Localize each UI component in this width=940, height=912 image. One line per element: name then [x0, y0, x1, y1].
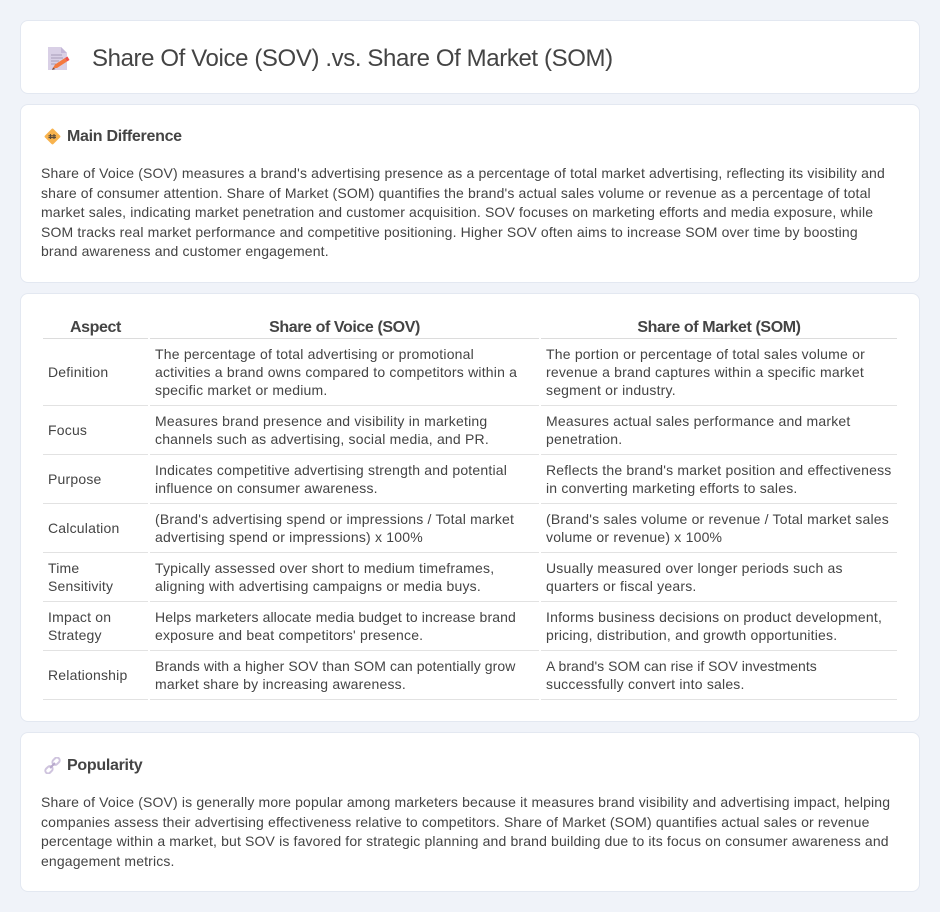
row: calculation: volume or revenue) x 100%: [546, 529, 722, 545]
row: calculation: (Brand's advertising spend or impressions / Total market: [155, 511, 514, 527]
row: definition: Definition: [48, 364, 108, 380]
row: impact on strategy: Informs business decisions on product development,: [546, 609, 882, 625]
text: main difference paragraph: share of consumer attention. Share of Market (SOM) quantifies the brand's actual sales volume or revenue as a percentage of total: [41, 185, 871, 201]
row: impact on strategy: Helps marketers allocate media budget to increase brand: [155, 609, 516, 625]
row: focus: [43, 413, 897, 455]
row: time sensitivity: aligning with advertising campaigns or media buys.: [155, 578, 481, 594]
icon: chain link: [44, 757, 61, 774]
table header row: [43, 319, 897, 700]
row: time sensitivity: quarters or fiscal years.: [546, 578, 696, 594]
row: purpose: influence on consumer awareness.: [155, 480, 378, 496]
row: impact on strategy: Strategy: [48, 627, 102, 643]
comparison table: [43, 319, 897, 700]
row: focus: Measures brand presence and visibility in marketing: [155, 413, 487, 429]
text: popularity paragraph: percentage within a market, but SOV is favored for strategic planning and brand building due to its focus on consumer awareness and: [41, 833, 889, 849]
panel: title card: [20, 20, 920, 94]
row: focus: channels such as advertising, social media, and PR.: [155, 431, 489, 447]
panel: comparison table: [20, 293, 920, 722]
row: relationship: A brand's SOM can rise if SOV investments: [546, 658, 817, 674]
panel: popularity: [20, 732, 920, 892]
table header row: Aspect: [70, 319, 121, 336]
row: relationship: [43, 658, 897, 700]
row: definition: specific market or medium.: [155, 382, 327, 398]
row: focus: Focus: [48, 422, 87, 438]
icon: orange diamond: [44, 128, 60, 144]
text: main difference paragraph: Share of Voice (SOV) measures a brand's advertising presence as a percentage of total market advertising, reflecting its visibility and: [41, 165, 885, 181]
heading: popularity: Popularity: [67, 757, 142, 774]
row: calculation: advertising spend or impressions) x 100%: [155, 529, 423, 545]
row: focus: penetration.: [546, 431, 622, 447]
row: purpose: in converting marketing efforts to sales.: [546, 480, 798, 496]
row: calculation: Calculation: [48, 520, 119, 536]
row: time sensitivity: Sensitivity: [48, 578, 113, 594]
title: Share Of Voice (SOV) .vs. Share Of Market (SOM): [92, 45, 613, 72]
row: purpose: Reflects the brand's market position and effectiveness: [546, 462, 892, 478]
text: popularity paragraph: engagement metrics.: [41, 853, 175, 869]
row: definition: The percentage of total advertising or promotional: [155, 346, 474, 362]
row: definition: activities a brand owns compared to competitors within a: [155, 364, 517, 380]
text: main difference paragraph: SOM tracks real market performance and competitive positioning. Higher SOV often aims to increase SOM over time by boosting: [41, 224, 858, 240]
row: impact on strategy: [43, 609, 897, 651]
row: impact on strategy: Impact on: [48, 609, 111, 625]
row: relationship: market share by increasing awareness.: [155, 676, 406, 692]
row: time sensitivity: Typically assessed over short to medium timeframes,: [155, 560, 494, 576]
row: purpose: [43, 462, 897, 504]
row: calculation: [43, 511, 897, 553]
text: popularity paragraph: companies assess their advertising effectiveness relative to competitors. Share of Market (SOM) quantifies actual sales or revenue: [41, 814, 870, 830]
row: relationship: Brands with a higher SOV than SOM can potentially grow: [155, 658, 516, 674]
icon: document with pencil: [48, 47, 70, 70]
row: definition: [43, 346, 897, 406]
row: relationship: Relationship: [48, 667, 127, 683]
row: relationship: successfully convert into sales.: [546, 676, 745, 692]
text: popularity paragraph: Share of Voice (SOV) is generally more popular among marketers because it measures brand visibility and advertising impact, helping: [41, 794, 890, 810]
row: calculation: (Brand's sales volume or revenue / Total market sales: [546, 511, 889, 527]
row: impact on strategy: pricing, distribution, and growth opportunities.: [546, 627, 837, 643]
row: purpose: Purpose: [48, 471, 102, 487]
row: time sensitivity: Usually measured over longer periods such as: [546, 560, 843, 576]
row: purpose: Indicates competitive advertising strength and potential: [155, 462, 507, 478]
text: main difference paragraph: market sales, indicating market penetration and customer acquisition. SOV focuses on marketing efforts and media exposure, while: [41, 204, 873, 220]
row: definition: revenue a brand captures within a specific market: [546, 364, 864, 380]
text: main difference paragraph: [41, 165, 885, 259]
row: focus: Measures actual sales performance and market: [546, 413, 850, 429]
row: time sensitivity: Time: [48, 560, 79, 576]
table header row: Share of Voice (SOV): [269, 319, 420, 336]
heading: main difference: Main Difference: [67, 128, 182, 145]
row: definition: segment or industry.: [546, 382, 676, 398]
row: definition: The portion or percentage of total sales volume or: [546, 346, 865, 362]
row: time sensitivity: [43, 560, 897, 602]
table header row: Share of Market (SOM): [637, 319, 801, 336]
row: impact on strategy: exposure and beat competitors' presence.: [155, 627, 423, 643]
panel: main difference: [20, 104, 920, 283]
text: main difference paragraph: brand awareness and customer engagement.: [41, 243, 329, 259]
text: popularity paragraph: [41, 794, 890, 869]
